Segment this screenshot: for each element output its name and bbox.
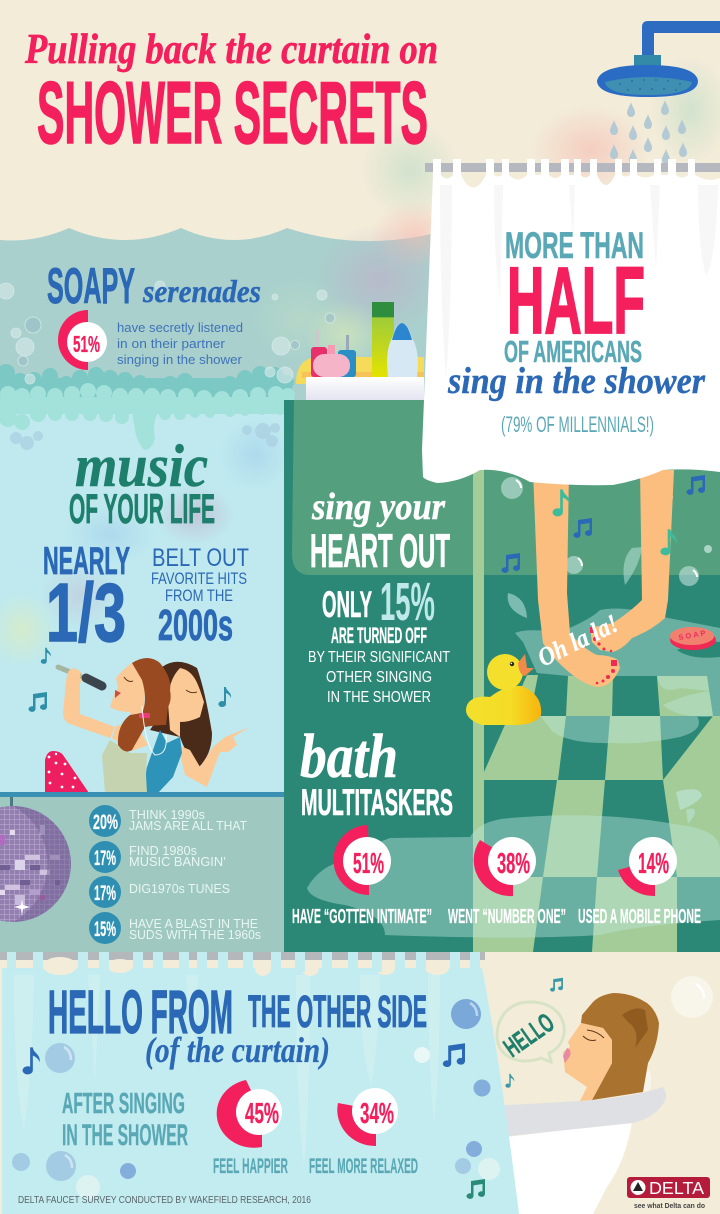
icon: disco ball [0, 797, 71, 922]
face [563, 1023, 612, 1101]
icon: shower head [597, 21, 720, 97]
blue music notes [23, 1043, 485, 1199]
curtain folds [14, 975, 440, 1165]
serenades statistic: in on their partner [117, 336, 226, 351]
first woman arm [63, 670, 115, 738]
hair [581, 993, 659, 1100]
legs and feet [533, 470, 674, 687]
donut 51 percent intimate: HAVE “GOTTEN INTIMATE” [292, 906, 432, 928]
panel text: sing your heart out: ARE TURNED OFF [331, 623, 427, 648]
second woman hair [150, 662, 212, 768]
scallops [43, 957, 449, 976]
significant other lines: OTHER SINGING [326, 669, 432, 686]
earphone cord [142, 706, 166, 755]
blue band above disco panel [0, 792, 284, 797]
donut 38 percent number one: 38% [497, 848, 530, 880]
donut 51 percent intimate [292, 825, 432, 928]
stat 1960s [89, 912, 261, 944]
curtain hooks [433, 159, 695, 179]
cream strip at bottom [0, 952, 720, 1214]
donut 38 percent number one [448, 837, 566, 928]
panel: music of your life background [0, 400, 285, 793]
decade stat list [89, 805, 261, 944]
singing music notes [29, 648, 231, 712]
logo: delta [627, 1177, 710, 1210]
second woman face [168, 668, 204, 737]
donut 51 percent: 51% [73, 331, 100, 357]
title [24, 27, 438, 162]
donut 45 percent [213, 1080, 288, 1178]
heading multitaskers: MULTITASKERS [301, 782, 453, 823]
panel: green shower stall wall and floor [284, 400, 720, 952]
curtain hanger rod [425, 163, 720, 172]
stat 1980s: 17% [94, 847, 116, 870]
hand on mic [68, 668, 80, 682]
stat 1990s: JAMS ARE ALL THAT [129, 818, 247, 833]
pink hair tie [139, 713, 150, 718]
hairbrush microphone [58, 667, 102, 686]
sing in the shower: sing in the shower [447, 361, 706, 402]
bubbles on wall [501, 477, 712, 824]
shelf with toiletries [296, 302, 424, 400]
second closed eye [186, 690, 197, 693]
panel text: hello from the other side: FEEL MORE RELAXED [309, 1155, 418, 1178]
mouth [115, 690, 121, 698]
heading serenades: serenades [142, 273, 261, 309]
first woman face [110, 663, 145, 725]
stat 1980s [89, 841, 226, 873]
title line one: Pulling back the curtain on [24, 27, 438, 73]
blue bubbles [12, 999, 500, 1199]
stat 1990s: THINK 1990s [129, 807, 205, 822]
donut 14 percent mobile phone [578, 837, 701, 928]
stat 1970s: 17% [94, 882, 116, 905]
significant other lines: IN THE SHOWER [327, 689, 431, 706]
belt out: BELT OUT [152, 544, 249, 572]
nearly one third: NEARLY [43, 540, 130, 583]
closed eye [583, 1030, 604, 1040]
shelf ledge [306, 377, 424, 400]
floor puddles [307, 609, 720, 938]
panel: white shower curtain [422, 159, 720, 485]
donut 51 percent intimate: 51% [353, 848, 384, 880]
rod [0, 952, 485, 960]
only: ONLY [322, 584, 372, 625]
fifteen percent: 15% [380, 572, 435, 632]
serenades statistic [117, 320, 243, 367]
second woman pointing arm [178, 727, 250, 787]
pink toenails [590, 627, 617, 684]
perfume bottles [311, 330, 356, 377]
panel: soapy serenades background [0, 228, 440, 410]
foam under soapy serenades [0, 364, 295, 450]
icon: rubber duck [466, 654, 541, 725]
heading sing your: sing your [311, 486, 446, 528]
exclamation: oh la la: Oh la la! [533, 609, 623, 672]
bathtub rim [490, 1087, 666, 1138]
heading music: music [75, 433, 208, 499]
favorite hits: FAVORITE HITS [151, 569, 247, 588]
stat 1980s: FIND 1980s [129, 843, 197, 858]
hair shading [622, 1008, 648, 1048]
small music notes [505, 978, 563, 1088]
bubbles at top of music panel [10, 423, 280, 450]
pastel steam haze [250, 55, 720, 370]
heading bath: bath [300, 723, 398, 791]
music notes on wall [502, 475, 705, 573]
donut 34 percent: 34% [360, 1098, 394, 1130]
panel text: music of your life: OF YOUR LIFE [69, 485, 215, 532]
speech bubble [497, 1002, 564, 1063]
panel text: hello from the other side: FEEL HAPPIER [213, 1155, 288, 1178]
panel text: bath multitaskers [292, 723, 701, 928]
panel text: sing your heart out [308, 486, 450, 706]
serenades statistic: have secretly listened [117, 320, 243, 335]
bathtub body [490, 1122, 632, 1214]
illustration: two women singing [29, 648, 250, 793]
donut 34 percent [309, 1088, 418, 1178]
bubble [671, 976, 713, 1018]
donut 38 percent number one: WENT “NUMBER ONE” [448, 906, 566, 928]
significant other lines [308, 649, 450, 706]
water drops [610, 100, 687, 164]
curtain folds [440, 185, 718, 380]
stat 1970s [89, 876, 230, 908]
stat 1960s: HAVE A BLAST IN THE [129, 916, 258, 931]
lighter foam band [0, 383, 295, 450]
serenades statistic: singing in the shower [117, 352, 243, 367]
checker floor tiles [473, 400, 720, 952]
heading soapy: SOAPY [47, 258, 135, 314]
panel text: music of your life [43, 433, 249, 659]
logo: delta: DELTA [649, 1178, 704, 1198]
2000s: 2000s [158, 601, 233, 650]
survey source: DELTA FAUCET SURVEY CONDUCTED BY WAKEFIELD RESEARCH, 2016 [18, 1194, 311, 1206]
stat 1970s: DIG1970s TUNES [129, 881, 230, 896]
bubbles in soapy panel [0, 281, 335, 384]
heading heart out: HEART OUT [310, 524, 450, 577]
text: THE OTHER SIDE [248, 986, 427, 1037]
pastel haze in music panel [0, 420, 290, 668]
darker foam band [0, 364, 294, 400]
of the curtain: (of the curtain) [145, 1030, 330, 1070]
panel text: soapy serenades [47, 258, 261, 370]
icon: soap shadow [677, 642, 720, 658]
lighter upper wall [292, 400, 720, 575]
stat 1990s [89, 805, 247, 837]
in the shower: IN THE SHOWER [62, 1119, 188, 1152]
stat 1990s: 20% [93, 811, 118, 834]
soap label: SOAP [678, 628, 708, 642]
hello label: HELLO [498, 1007, 560, 1063]
after singing: AFTER SINGING [62, 1088, 185, 1120]
from the: FROM THE [165, 586, 233, 605]
panel: blue bottom curtain [0, 952, 519, 1214]
first woman top [102, 740, 147, 793]
donut 14 percent mobile phone: 14% [638, 848, 669, 880]
hooks [7, 952, 480, 972]
white and blue bottle [387, 323, 418, 377]
first woman hair [118, 658, 171, 752]
mouth [563, 1048, 571, 1063]
stat 1980s: MUSIC BANGIN’ [129, 854, 226, 869]
second woman top [142, 730, 182, 793]
closed eye [124, 677, 133, 682]
logo: delta: see what Delta can do [634, 1201, 705, 1210]
green bottle [372, 302, 394, 377]
ball shading [13, 806, 71, 922]
donut 51 percent [58, 310, 107, 370]
significant other lines: BY THEIR SIGNIFICANT [308, 649, 450, 666]
first woman shoulder [112, 722, 148, 751]
panel text: hello from the other side: HELLO FROM [48, 978, 233, 1046]
pink polka dot pants [45, 751, 89, 793]
steam behind hair [635, 1060, 651, 1095]
panel: decade stats background [0, 797, 284, 952]
stat 1960s: SUDS WITH THE 1960s [129, 927, 261, 942]
illustration: woman in bathtub [490, 976, 713, 1214]
donut 45 percent: 45% [245, 1098, 279, 1130]
icon: soap bar [670, 627, 716, 650]
fraction: 1/3 [46, 566, 126, 659]
stat 1960s: 15% [94, 918, 116, 941]
panel text: hello from the other side [18, 978, 427, 1206]
callout: more than half [447, 225, 706, 437]
